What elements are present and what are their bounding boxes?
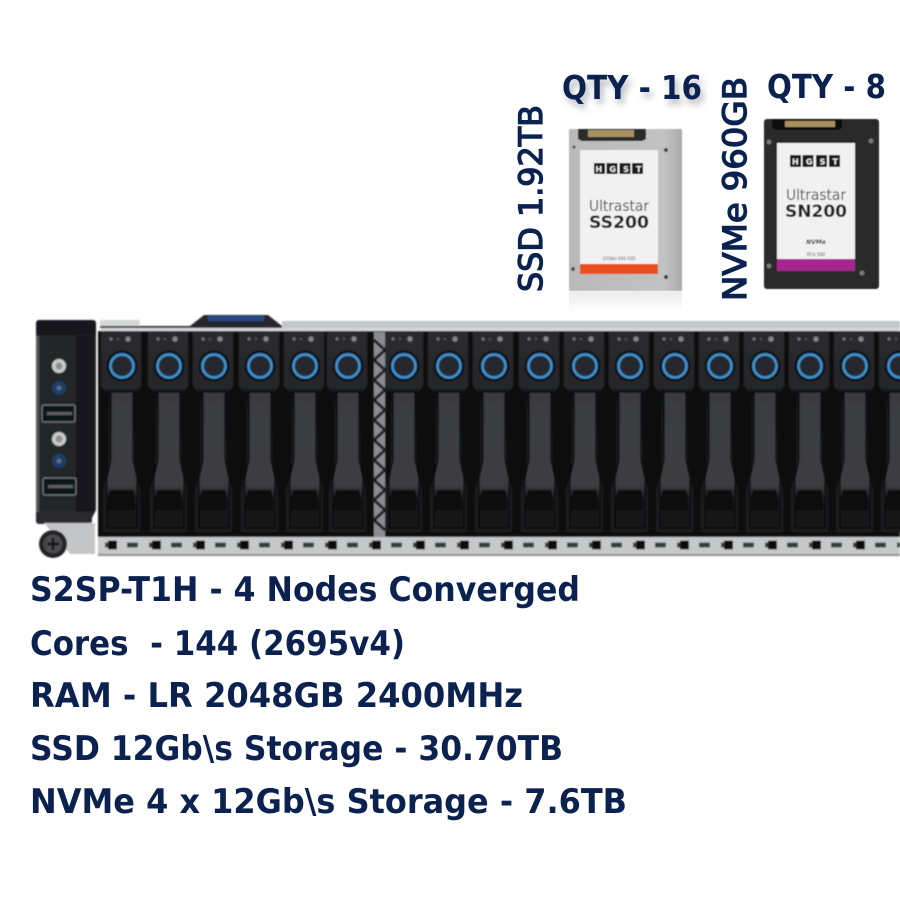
- spec: NVMe storage: NVMe 4 x 12Gb\s Storage - 7.6TB: [30, 782, 627, 822]
- label brand: HGST: [792, 158, 839, 166]
- NVMe 960GB drive image: SN200: [785, 202, 847, 222]
- SSD 1.92TB drive image: SS200: [589, 213, 649, 233]
- NVMe 960GB drive image: [764, 119, 879, 289]
- label brand: HGST: [596, 165, 642, 174]
- specification text block: [30, 570, 627, 822]
- heading: QTY 8: QTY - 8: [767, 67, 886, 106]
- heading: QTY 16 shadow: QTY - 16: [565, 73, 705, 112]
- NVMe 960GB drive image: NVMe: [806, 239, 826, 246]
- spec: SSD storage: SSD 12Gb\s Storage - 30.70TB: [30, 729, 563, 769]
- left ear with buttons and USB ports: [36, 320, 96, 524]
- spec: RAM: RAM - LR 2048GB 2400MHz: [30, 676, 523, 716]
- SSD 1.92TB drive image: 12Gb/s SAS SSD: [603, 256, 635, 261]
- drive bays: [101, 332, 900, 532]
- heading: QTY 16: QTY - 16: [562, 68, 702, 107]
- SSD reflection: [569, 292, 682, 312]
- NVMe 960GB drive image: PCIe SSD: [807, 252, 825, 257]
- server chassis: [36, 315, 900, 558]
- rotated label: NVMe 960GB: NVMe 960GB: [716, 77, 754, 301]
- drive cage background: [98, 331, 900, 539]
- thumbscrew bracket: [39, 523, 95, 558]
- SSD 1.92TB drive image: [569, 129, 682, 291]
- bottom vent strip: [98, 537, 900, 556]
- spec: model: S2SP-T1H - 4 Nodes Converged: [30, 570, 580, 610]
- rotated label: SSD 1.92TB: SSD 1.92TB: [512, 105, 550, 292]
- label model: Ultrastar: [589, 197, 650, 215]
- centre mesh divider: [374, 332, 385, 537]
- label brand: [790, 155, 840, 167]
- spec: cores: Cores - 144 (2695v4): [30, 624, 405, 664]
- chassis top rail: [100, 315, 900, 331]
- label model: Ultrastar: [786, 186, 847, 204]
